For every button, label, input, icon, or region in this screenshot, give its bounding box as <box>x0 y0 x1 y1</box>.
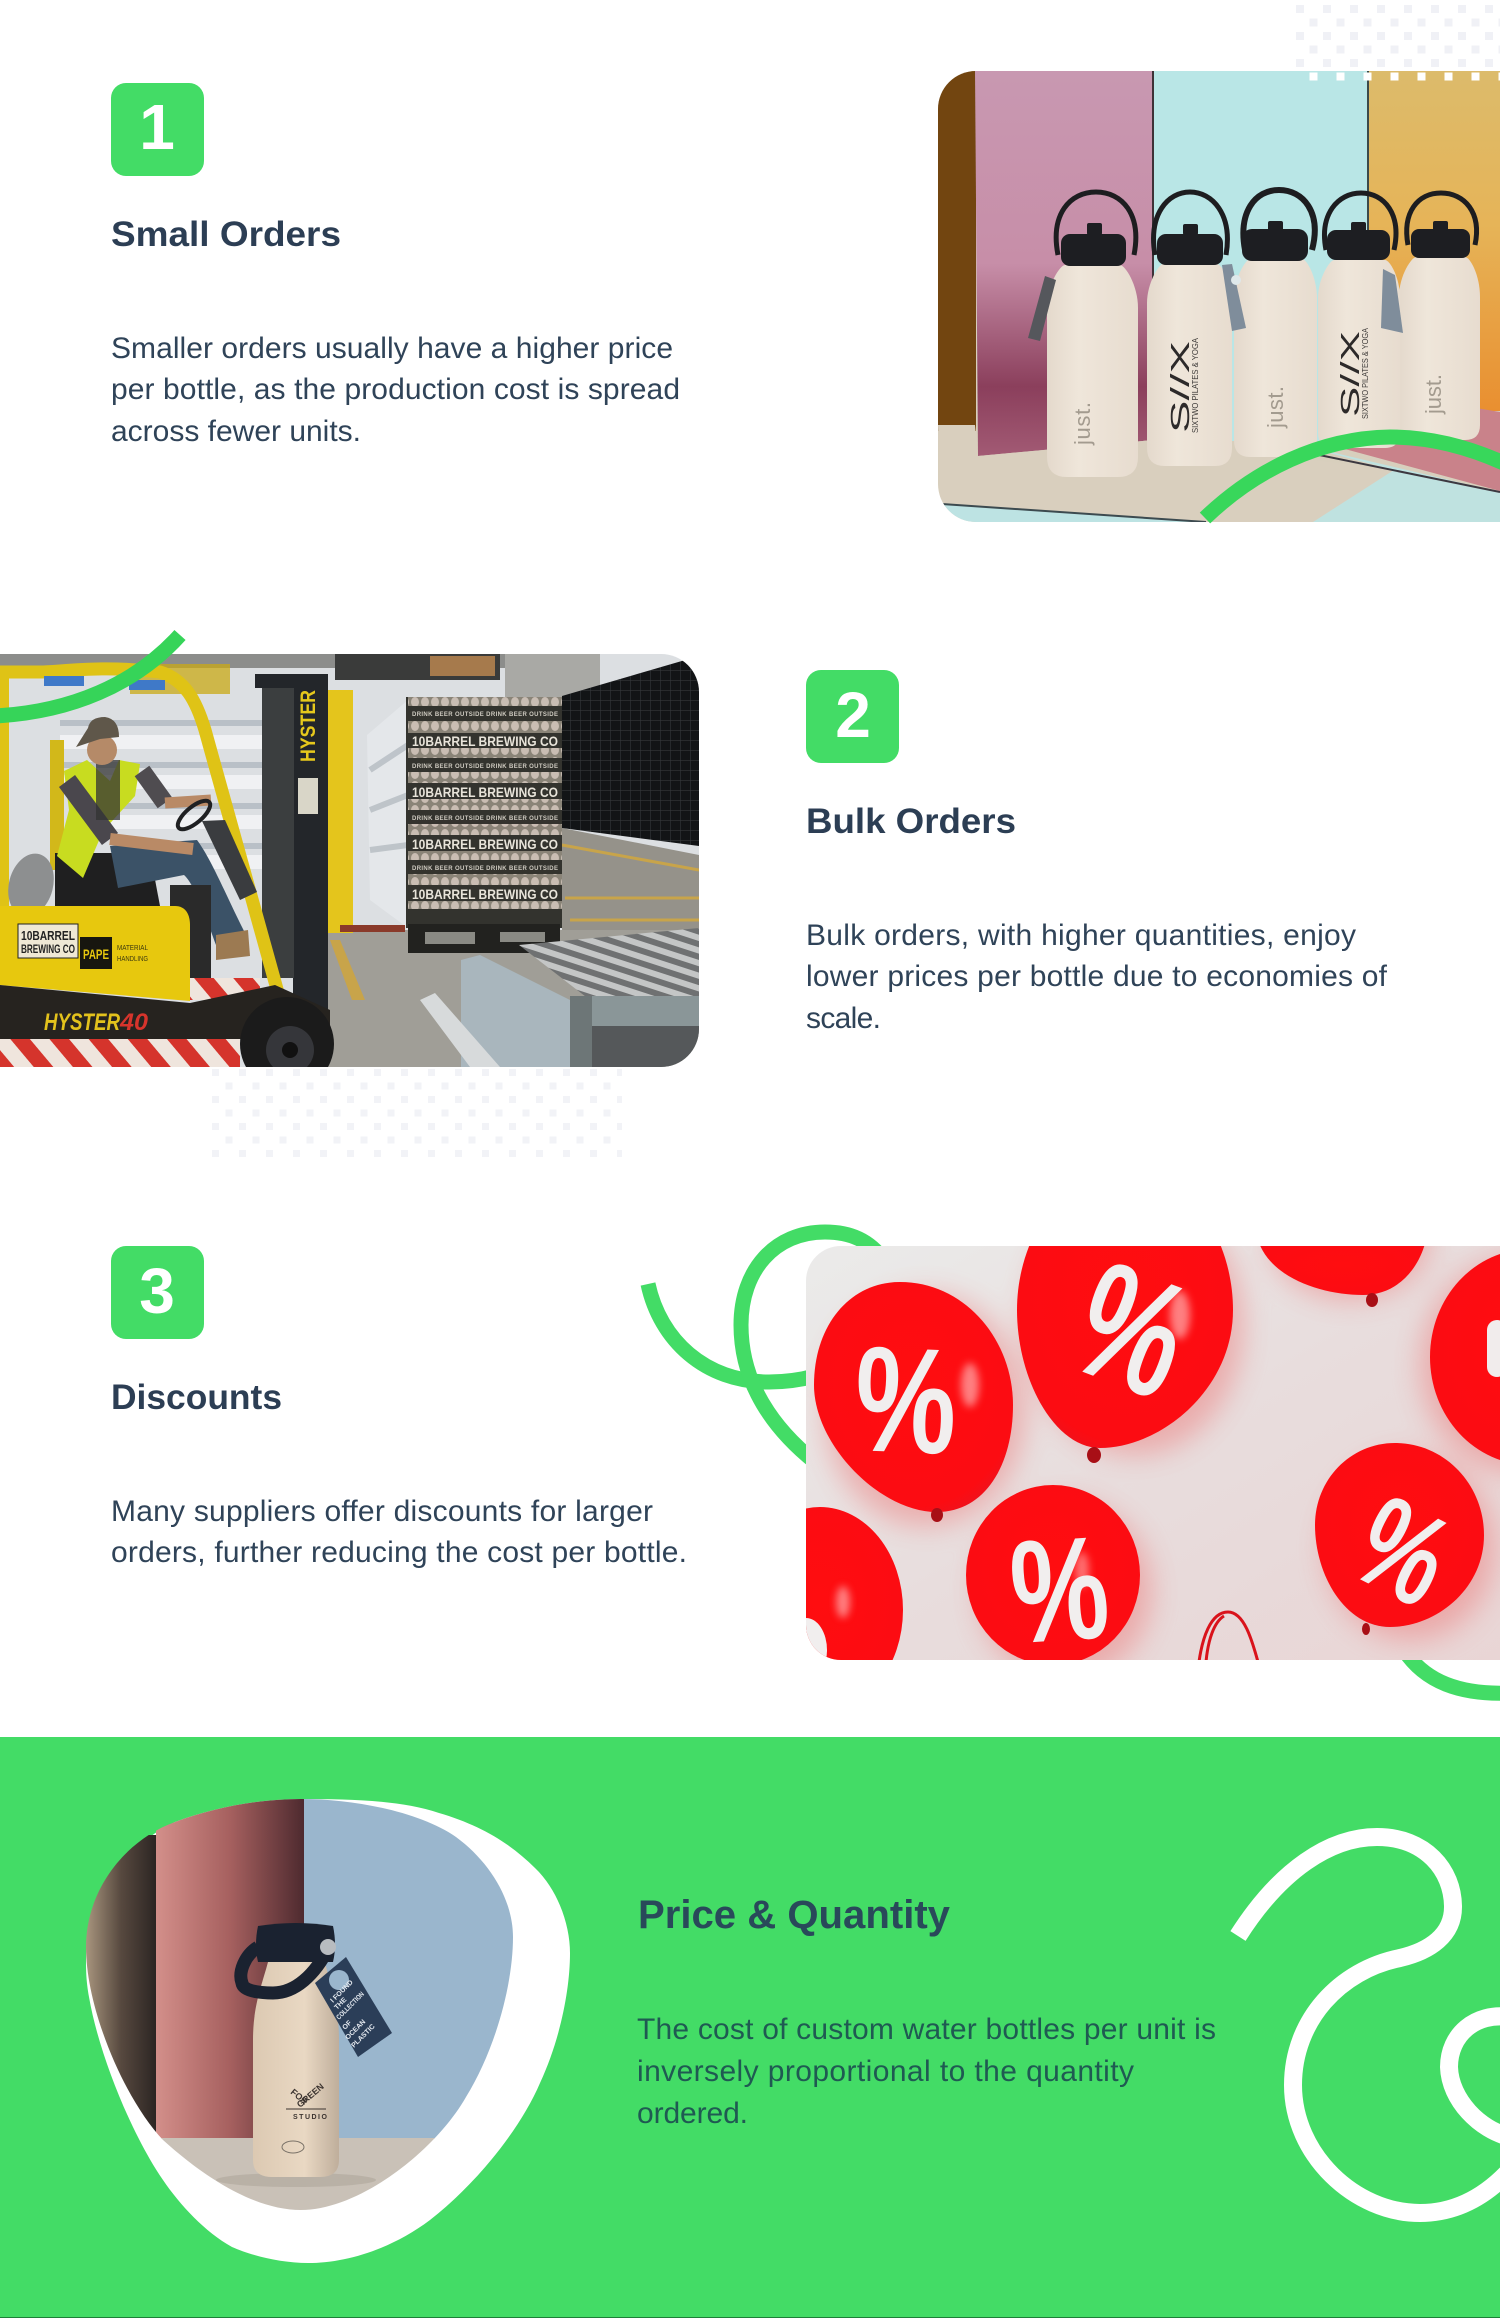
text: small orders: per bottle, as the production cost is spread <box>111 373 680 406</box>
pallet of cans <box>367 697 562 953</box>
hang tag: PLASTIC <box>350 2023 377 2049</box>
text: price and quantity: inversely proportional to the quantity <box>637 2055 1134 2088</box>
forklift body: BREWING CO <box>21 942 75 956</box>
pallet of cans: 10BARREL BREWING CO <box>412 836 558 852</box>
bottle 4 <box>1318 193 1400 448</box>
text: bulk orders: scale. <box>806 1002 881 1035</box>
operator <box>1 717 257 978</box>
dot pattern: top right <box>1296 0 1500 71</box>
pallet of cans: 10BARREL BREWING CO <box>412 784 558 800</box>
pallet of cans: DRINK BEER OUTSIDE DRINK BEER OUTSIDE <box>412 712 558 718</box>
forklift body: HYSTER <box>44 1009 121 1036</box>
bottle 2 <box>1147 192 1232 466</box>
floor <box>300 930 699 1067</box>
heading: small orders: Small Orders <box>111 215 341 254</box>
balloon shadows <box>812 1246 1500 1660</box>
yellow forks <box>321 690 405 933</box>
forklift body: PAPE <box>83 946 109 962</box>
text: small orders: Smaller orders usually have a higher price <box>111 332 673 365</box>
green arc over bottles <box>1205 437 1500 518</box>
text: small orders <box>111 332 680 448</box>
pallet of cans: 10BARREL BREWING CO <box>412 733 558 749</box>
heading: bulk orders: Bulk Orders <box>806 802 1016 841</box>
forklift mast: HYSTER <box>297 690 320 762</box>
badge 2: 2 <box>835 679 871 751</box>
panel: price and quantity <box>0 1737 1500 2318</box>
balloon E: % <box>1333 1468 1473 1635</box>
forklift body: 40 <box>119 1009 149 1036</box>
white blob <box>86 1799 570 2263</box>
pallet of cans: DRINK BEER OUTSIDE DRINK BEER OUTSIDE <box>412 764 558 770</box>
text: discounts: Many suppliers offer discounts for larger <box>111 1495 653 1528</box>
photo: percent balloons <box>806 1246 1500 1660</box>
bottle 1: just. <box>1070 402 1095 446</box>
hang tag: COLLECTION <box>335 1991 366 2021</box>
forklift body: MATERIAL <box>117 945 148 952</box>
pallet of cans: 10BARREL BREWING CO <box>412 886 558 902</box>
text: bulk orders: lower prices per bottle due to economies of <box>806 960 1388 993</box>
text: price and quantity: The cost of custom water bottles per unit is <box>637 2013 1216 2046</box>
bottle handle <box>241 1947 329 1993</box>
balloon C <box>1260 1246 1424 1307</box>
text: bulk orders: Bulk orders, with higher quantities, enjoy <box>806 919 1356 952</box>
balloon G <box>806 1507 903 1660</box>
hang tag: I FOUND <box>329 1979 355 2004</box>
bottle 3 <box>1234 190 1317 457</box>
hang tags <box>1028 264 1403 341</box>
balloon D <box>1430 1249 1500 1465</box>
heading: discounts: Discounts <box>111 1378 282 1417</box>
bottle 2: S//X <box>1165 341 1195 433</box>
pallet of cans: DRINK BEER OUTSIDE DRINK BEER OUTSIDE <box>412 866 558 872</box>
hang tag <box>315 1957 392 2057</box>
bottle 5 <box>1399 193 1480 440</box>
bottle 3: just. <box>1263 386 1288 429</box>
conveyor <box>420 928 699 1067</box>
forklift wheel <box>240 997 334 1067</box>
photo: row of bottles <box>938 71 1500 522</box>
bottle cap <box>256 1923 335 1962</box>
green loop behind balloons <box>648 1232 1500 1693</box>
bottle logo: FOR <box>289 2087 310 2107</box>
bottle 2: SIXTWO PILATES & YOGA <box>1191 337 1200 433</box>
forklift body: HANDLING <box>117 956 148 963</box>
badge 3: 3 <box>139 1255 175 1327</box>
hang tag: OCEAN <box>344 2019 367 2041</box>
stacked black crates <box>562 656 699 846</box>
badge 2 <box>806 670 899 763</box>
balloon B <box>1017 1246 1233 1463</box>
heading: price and quantity: Price & Quantity <box>638 1893 951 1937</box>
bottle 4: S//X <box>1335 331 1365 417</box>
photo: single bottle in blob <box>86 1799 516 2218</box>
text: discounts <box>111 1495 687 1569</box>
forklift mast <box>255 674 328 1024</box>
balloon A <box>814 1282 1013 1522</box>
balloon B: % <box>1051 1226 1213 1435</box>
balloon F: % <box>1005 1506 1114 1675</box>
badge 1: 1 <box>139 91 175 163</box>
balloon A: % <box>852 1315 959 1486</box>
forklift body: 10BARREL <box>21 928 75 943</box>
green arc over forklift <box>0 635 180 716</box>
dot pattern: under forklift <box>212 1069 622 1158</box>
hang tag: THE <box>333 1996 349 2011</box>
badge 1 <box>111 83 204 176</box>
text: small orders: across fewer units. <box>111 415 361 448</box>
forklift cab frame <box>0 664 280 1000</box>
forklift body <box>0 906 330 1067</box>
text: discounts: orders, further reducing the cost per bottle. <box>111 1536 687 1569</box>
white squiggle <box>1238 1837 1500 2213</box>
photo: forklift with pallet <box>0 654 699 1091</box>
pallet of cans: DRINK BEER OUTSIDE DRINK BEER OUTSIDE <box>412 816 558 822</box>
bottle 4: SIXTWO PILATES & YOGA <box>1361 327 1370 419</box>
text: bulk orders <box>806 919 1388 1035</box>
bottle body <box>253 1962 339 2177</box>
bottle logo: GREEN <box>295 2081 326 2110</box>
bottle 5: just. <box>1421 374 1446 415</box>
balloon F <box>966 1485 1140 1675</box>
bottle logo: STUDIO <box>293 2114 328 2121</box>
red bag handle <box>1199 1612 1258 1662</box>
text: price and quantity: ordered. <box>637 2097 748 2130</box>
bottle 1 <box>1047 192 1138 477</box>
badge 3 <box>111 1246 204 1339</box>
text: price and quantity <box>637 2013 1216 2130</box>
white dots over bottle photo <box>1296 71 1500 83</box>
hang tag: OF <box>341 2019 354 2031</box>
bottle logo <box>282 2081 328 2153</box>
